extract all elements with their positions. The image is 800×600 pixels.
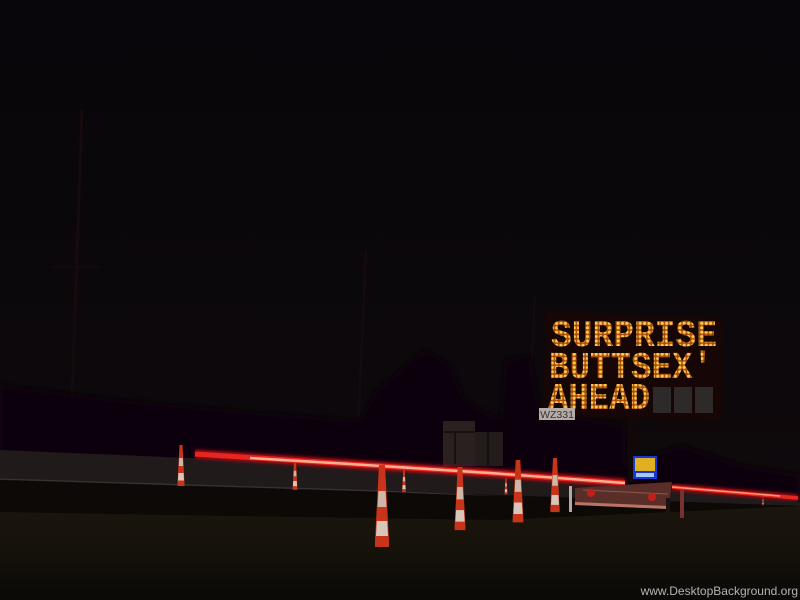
left cone <box>178 445 184 486</box>
small blue display <box>633 456 657 479</box>
large cone <box>375 465 389 547</box>
sign message: SURPRISE <box>551 315 717 358</box>
sign message <box>548 315 717 421</box>
red tail-light streak <box>195 454 798 498</box>
road surface <box>0 450 800 506</box>
small cone <box>293 462 297 490</box>
cone <box>550 458 560 512</box>
sign pole <box>628 416 635 482</box>
sign message: BUTTSEX' <box>549 347 713 390</box>
small distant cone <box>505 478 507 494</box>
dark shoulder <box>0 481 800 520</box>
cone <box>513 460 523 522</box>
unlit panel segments <box>653 387 713 413</box>
sign message: AHEAD <box>548 378 650 421</box>
distant tree line <box>0 350 800 495</box>
far right cone <box>762 497 764 505</box>
faint utility poles <box>52 110 535 440</box>
board panel <box>543 311 723 420</box>
traffic cones <box>178 445 764 547</box>
background signs <box>443 421 503 466</box>
cone <box>455 467 465 530</box>
grass field <box>0 506 800 600</box>
message board <box>543 311 723 421</box>
watermark: www.DesktopBackground.org <box>640 584 798 598</box>
small cone <box>402 470 406 492</box>
road edge line <box>0 479 510 497</box>
trailer <box>569 482 684 520</box>
sign number plate: WZ331 <box>540 409 574 421</box>
